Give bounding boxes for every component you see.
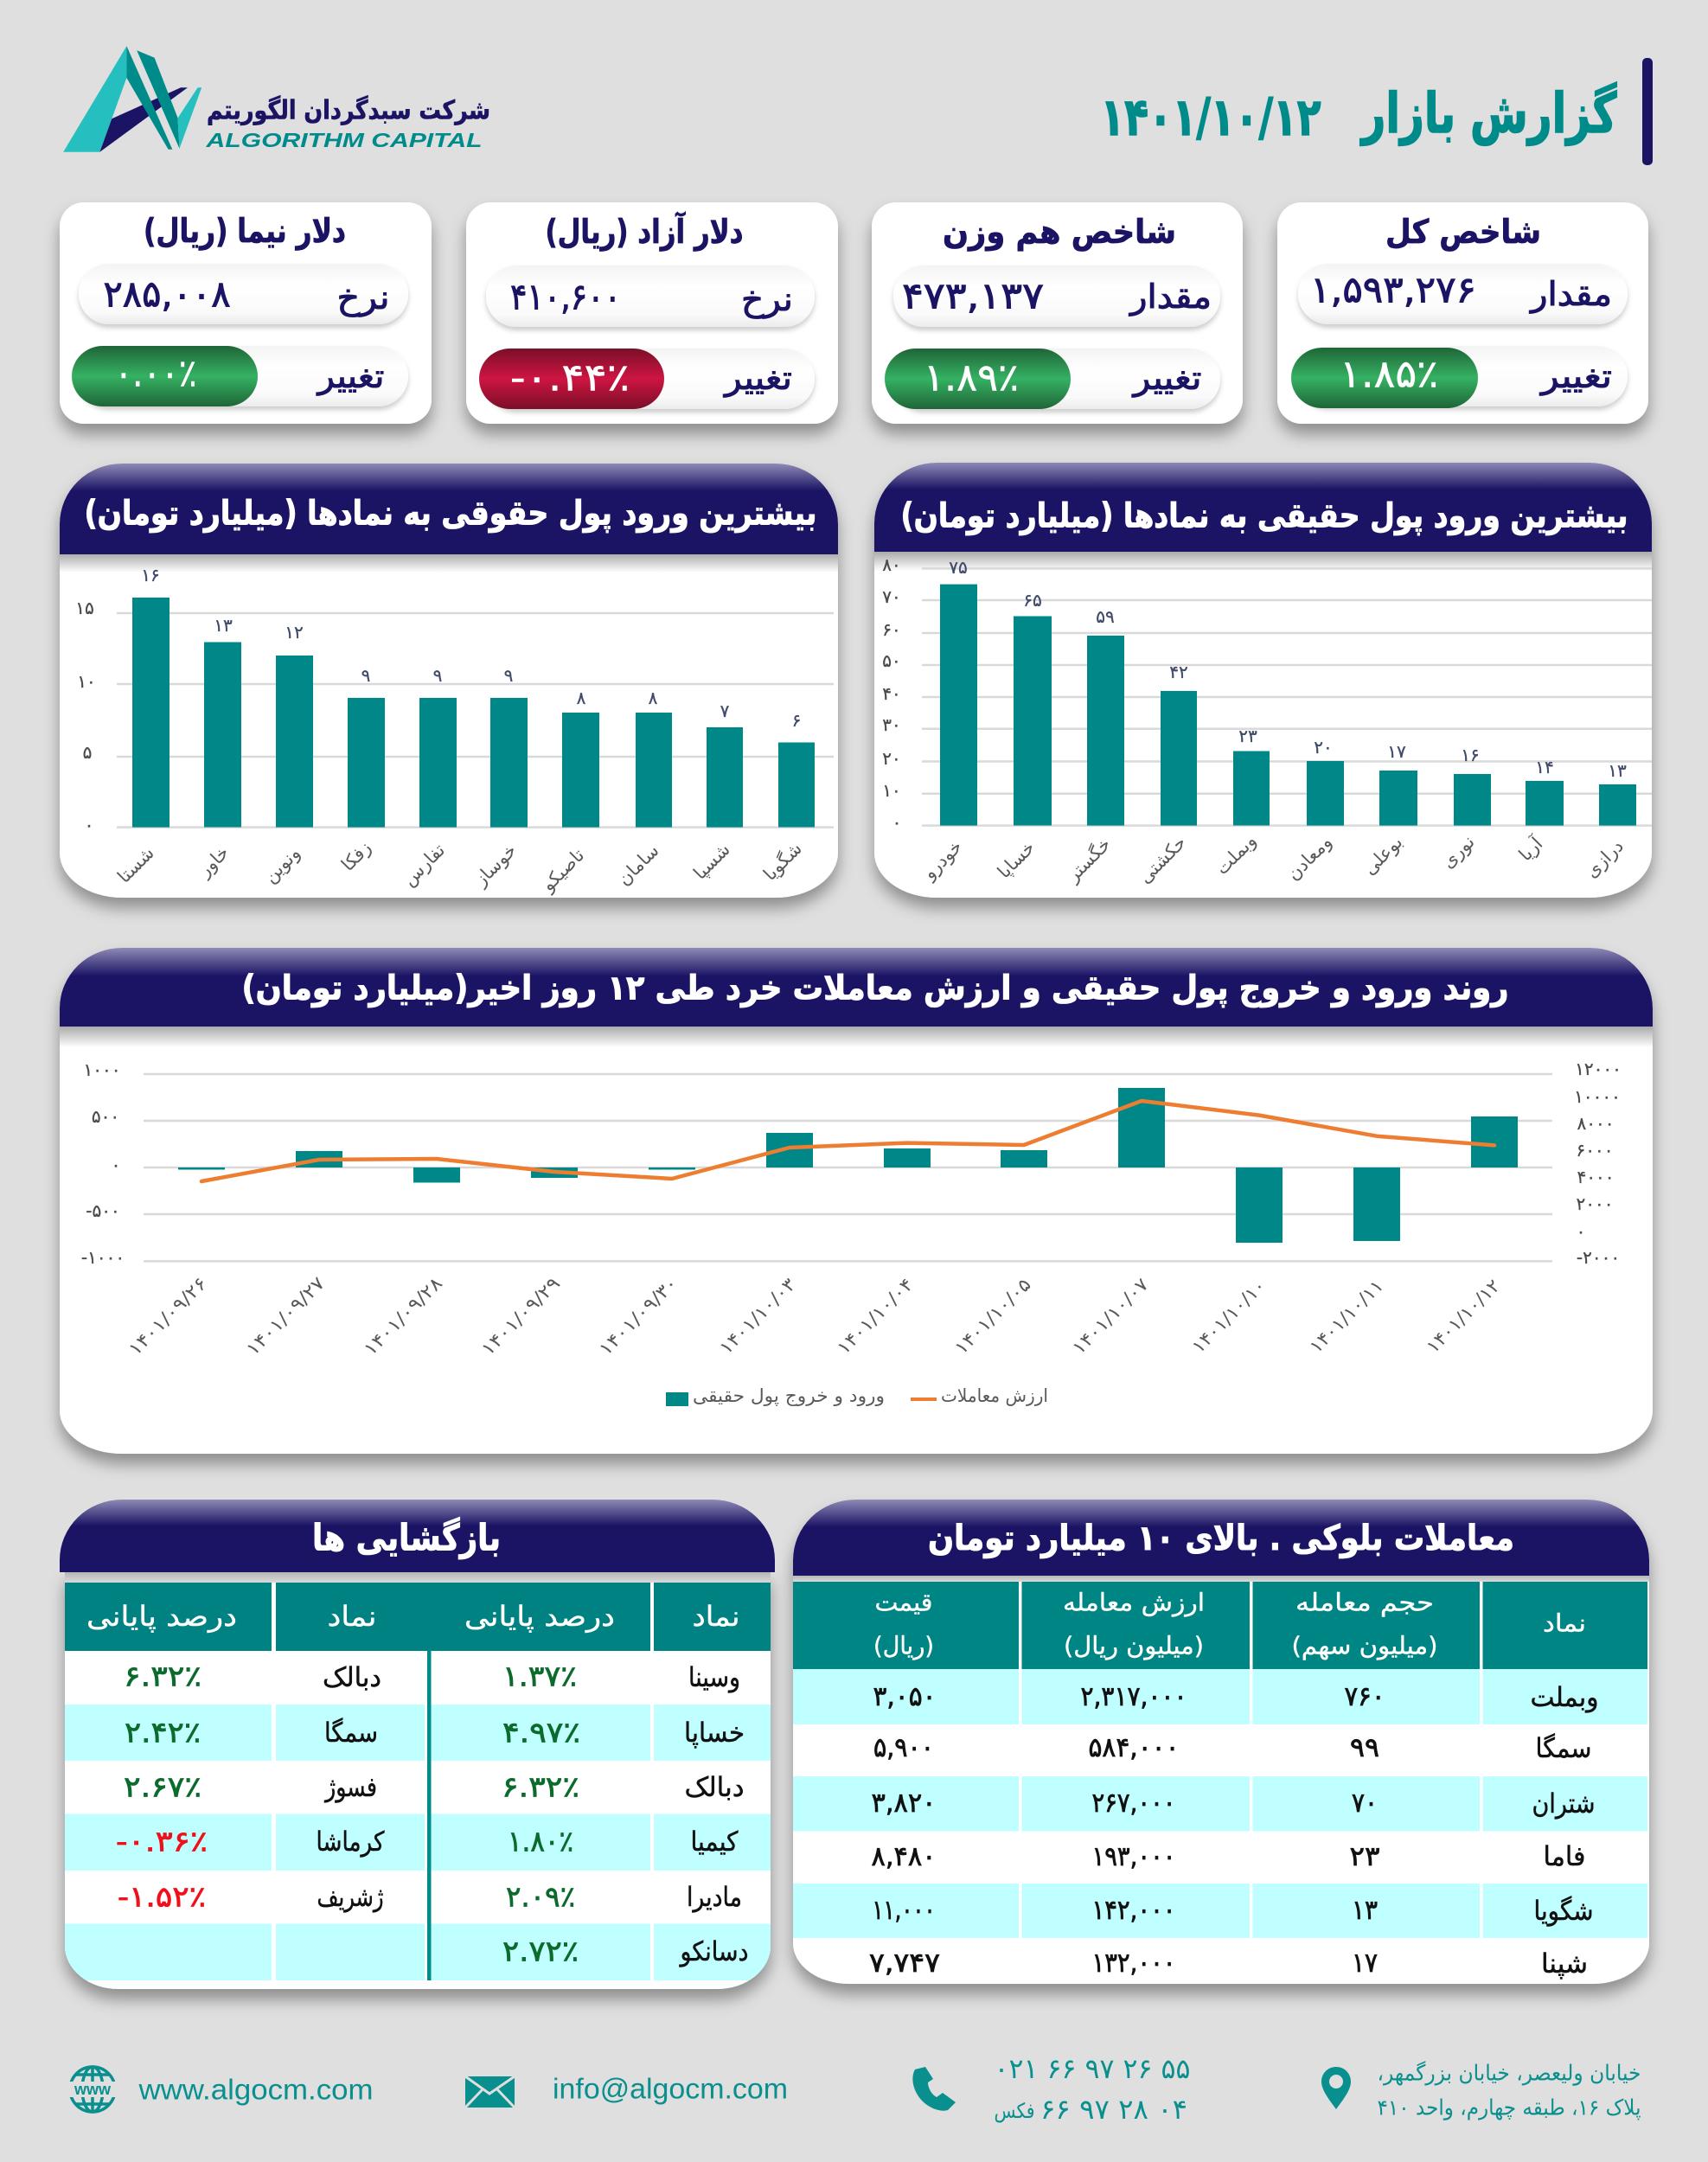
bar chart: real money inflow: ۳۰ [882, 714, 901, 735]
combo chart: money flow and trade value: ۴۰۰۰ [1577, 1167, 1614, 1187]
combo chart: money flow and trade value: ۲۰۰۰ [1577, 1193, 1613, 1214]
table: reopened symbols: فسوژ [323, 1772, 377, 1803]
table: block trades: (میلیون سهم) [1292, 1631, 1437, 1660]
bar chart: real money inflow: وبملت [1212, 830, 1260, 879]
table: reopened symbols: کرماشا [317, 1826, 385, 1858]
change pill: تغییر [1539, 357, 1612, 396]
value pill: نرخ [337, 278, 389, 317]
bar chart: legal money inflow: سامان [613, 840, 663, 890]
bar chart: legal money inflow: ۱۲ [285, 622, 304, 643]
bar chart: legal money inflow: ۱۰ [77, 671, 96, 692]
table: reopened symbols: نماد [327, 1600, 377, 1633]
card title: شاخص کل [1385, 213, 1541, 251]
panel header [60, 948, 1653, 1027]
bar chart: real money inflow: ۸۰ [882, 554, 901, 575]
combo chart: money flow and trade value: ۱۴۰۱/۰۹/۲۷ [242, 1273, 329, 1359]
bar chart: legal money inflow: ۱۶ [141, 565, 160, 585]
bar chart: real money inflow: نوری [1437, 831, 1479, 873]
bar chart: real money inflow: بوعلی [1359, 832, 1406, 879]
bar chart: legal money inflow: ۵ [83, 742, 92, 763]
table: reopened symbols: ۱.۸۰٪ [508, 1825, 573, 1858]
card title: دلار نیما (ریال) [144, 212, 346, 250]
bar chart: real money inflow: خودرو [918, 836, 966, 884]
combo chart: money flow and trade value: ۱۴۰۱/۱۰/۱۲ [1423, 1276, 1504, 1357]
bar chart: legal money inflow: زفکا [337, 837, 375, 875]
footer: phone: ۰۲۱ ۶۶ ۹۷ ۲۶ ۵۵ [995, 2052, 1190, 2085]
table: block trades: قیمت [875, 1588, 932, 1617]
icon: map pin [1321, 2067, 1351, 2109]
table: reopened symbols: ۲.۰۹٪ [506, 1880, 575, 1913]
table: block trades: ۲,۳۱۷,۰۰۰ [1081, 1681, 1187, 1712]
table: block trades: ۱۴۲,۰۰۰ [1091, 1895, 1176, 1926]
bar chart: real money inflow: ۰ [892, 812, 901, 833]
value pill: ۱,۵۹۳,۲۷۶ [1310, 268, 1476, 311]
table: block trades: ۳,۰۵۰ [873, 1681, 936, 1712]
combo chart: money flow and trade value: ۱۴۰۱/۰۹/۲۶ [125, 1273, 211, 1359]
table: reopened symbols: دبالک [323, 1662, 381, 1693]
table: block trades: ۵۸۴,۰۰۰ [1088, 1732, 1180, 1763]
bar chart: real money inflow: خساپا [994, 837, 1039, 882]
panel title: بیشترین ورود پول حقوقی به نمادها (میلیارد تومان) [85, 495, 816, 533]
bar chart: real money inflow: ۲۰ [1314, 737, 1333, 758]
combo chart: money flow and trade value: ۱۴۰۱/۱۰/۰۴ [833, 1274, 918, 1359]
change pill: تغییر [723, 359, 792, 398]
value pill: ۴۱۰,۶۰۰ [510, 275, 621, 318]
footer: address: پلاک ۱۶، طبقه چهارم، واحد ۴۱۰ [1377, 2095, 1641, 2120]
bar chart: legal money inflow: تفارس [399, 840, 449, 890]
combo chart: money flow and trade value: ۱۴۰۱/۱۰/۱۱ [1306, 1276, 1387, 1357]
bar chart: legal money inflow: ۰ [85, 815, 93, 835]
combo chart: money flow and trade value: -۲۰۰۰ [1577, 1247, 1620, 1268]
combo chart: money flow and trade value [81, 1059, 1622, 1359]
card title: شاخص هم وزن [943, 213, 1176, 252]
chart legend: ورود و خروج پول حقیقی [693, 1385, 885, 1407]
card title: دلار آزاد (ریال) [545, 211, 744, 251]
combo chart: money flow and trade value: ۰ [1577, 1221, 1585, 1242]
panel title: روند ورود و خروج پول حقیقی و ارزش معاملات خرد طی ۱۲ روز اخیر(میلیارد تومان) [241, 969, 1508, 1008]
combo chart: money flow and trade value: ۰ [112, 1155, 120, 1175]
table: reopened symbols: مادیرا [687, 1882, 742, 1913]
table: block trades: (میلیون ریال) [1064, 1631, 1204, 1660]
table: block trades [793, 1582, 1647, 1984]
icon: globe: www [74, 2081, 112, 2098]
combo chart: money flow and trade value: ۱۰۰۰۰ [1574, 1086, 1621, 1107]
change pill: تغییر [316, 357, 384, 396]
bar chart: real money inflow: ۵۹ [1096, 606, 1115, 627]
table: block trades: ۱۳ [1352, 1895, 1378, 1926]
bar chart: legal money inflow: شگویا [759, 838, 806, 885]
table: reopened symbols: ۶.۳۲٪ [124, 1659, 202, 1693]
table: reopened symbols: ژشریف [317, 1882, 384, 1913]
panel title: بازگشایی ها [312, 1517, 501, 1558]
value pill: نرخ [741, 280, 793, 319]
bar chart: legal money inflow: ۹ [361, 665, 370, 686]
footer: website: www.algocm.com [138, 2074, 374, 2105]
table: reopened symbols [65, 1583, 771, 1980]
bar chart: real money inflow: ۲۳ [1238, 726, 1257, 746]
chart legend: ارزش معاملات [941, 1385, 1048, 1406]
footer: email [465, 2072, 788, 2108]
bar chart: real money inflow: آریا [1514, 832, 1547, 865]
table: reopened symbols: وسینا [688, 1662, 740, 1693]
value pill: مقدار [1529, 275, 1612, 313]
bar chart: real money inflow: ومعادن [1283, 831, 1336, 885]
change pill: ۰.۰۰٪ [114, 351, 197, 396]
table: block trades: ۵,۹۰۰ [873, 1732, 934, 1763]
bar chart: real money inflow: خگستر [1062, 834, 1115, 886]
table: reopened symbols: درصد پایانی [86, 1600, 237, 1633]
bar chart: legal money inflow: تاصیکو [537, 845, 588, 896]
table: reopened symbols: ۶.۳۲٪ [502, 1769, 579, 1804]
change pill [1291, 346, 1628, 408]
bar chart: legal money inflow: ۸ [577, 688, 586, 708]
table: block trades: ۱۷ [1352, 1948, 1378, 1979]
change pill [479, 349, 815, 409]
table: block trades: ۹۹ [1350, 1732, 1379, 1763]
chart legend [666, 1385, 1048, 1407]
logo: Algorithm Capital [63, 46, 490, 152]
table: block trades: ۱۳۲,۰۰۰ [1091, 1948, 1176, 1979]
change pill [72, 346, 408, 406]
change pill: ۱.۸۹٪ [924, 356, 1019, 400]
table: reopened symbols: نماد [692, 1600, 740, 1633]
panel title: معاملات بلوکی . بالای ۱۰ میلیارد تومان [928, 1519, 1514, 1558]
change pill [885, 349, 1220, 409]
table: block trades: (ریال) [873, 1631, 934, 1660]
table: reopened symbols: ۲.۷۲٪ [502, 1934, 579, 1968]
value pill [486, 265, 815, 327]
bar chart: real money inflow: ۱۳ [1608, 760, 1627, 781]
icon: handset [912, 2067, 956, 2111]
bar chart: legal money inflow: ۱۵ [75, 598, 94, 618]
table: block trades: سمگا [1536, 1733, 1591, 1764]
value pill [893, 265, 1220, 327]
bar chart: real money inflow [882, 554, 1652, 887]
logo: Algorithm Capital: شرکت سبدگردان الگوریتم [207, 95, 490, 126]
bar chart: legal money inflow: خوساز [470, 840, 521, 891]
table: block trades: ۷,۷۴۷ [869, 1948, 940, 1979]
combo chart: money flow and trade value: -۵۰۰ [86, 1200, 120, 1221]
bar chart: legal money inflow [75, 565, 834, 896]
combo chart: money flow and trade value: ۸۰۰۰ [1577, 1113, 1614, 1134]
panel: reopened symbols [60, 1500, 775, 1989]
table: reopened symbols: سمگا [324, 1717, 378, 1749]
panel: block trades [793, 1500, 1649, 1984]
combo chart: money flow and trade value: ۱۴۰۱/۰۹/۳۰ [595, 1273, 681, 1359]
panel: top real money inflow [874, 463, 1652, 898]
table: reopened symbols: کیمیا [690, 1826, 739, 1858]
table: reopened symbols: ۱.۳۷٪ [502, 1659, 577, 1693]
table: block trades: ۸,۴۸۰ [872, 1841, 936, 1872]
table: block trades: ۷۶۰ [1344, 1681, 1385, 1712]
table: block trades: ۲۳ [1349, 1841, 1380, 1872]
table: block trades: فاما [1543, 1841, 1586, 1872]
bar chart: real money inflow: حکشتی [1135, 832, 1190, 887]
card: Nima dollar [60, 202, 432, 424]
combo chart: money flow and trade value: ۱۴۰۱/۱۰/۱۰ [1188, 1276, 1270, 1357]
table: reopened symbols: خساپا [684, 1717, 745, 1749]
panel: top legal money inflow [60, 464, 838, 898]
combo chart: money flow and trade value: ۱۴۰۱/۱۰/۰۷ [1068, 1274, 1153, 1359]
table: block trades: حجم معامله [1295, 1588, 1434, 1617]
footer: phone [912, 2052, 1190, 2126]
combo chart: money flow and trade value: ۵۰۰ [92, 1106, 119, 1127]
bar chart: legal money inflow: ۷ [720, 700, 730, 721]
bar chart: legal money inflow: خاور [194, 841, 233, 881]
bar chart: real money inflow: ۱۰ [882, 780, 901, 801]
change pill: تغییر [1131, 359, 1202, 398]
bar chart: real money inflow: ۱۴ [1535, 757, 1554, 777]
value pill: مقدار [1129, 278, 1212, 316]
table: reopened symbols: ۲.۶۷٪ [124, 1769, 202, 1804]
bar chart: legal money inflow: ونوین [259, 842, 304, 887]
bar chart: real money inflow: ۷۵ [949, 557, 968, 578]
bar chart: real money inflow: ۵۰ [882, 650, 901, 671]
bar chart: legal money inflow: ۹ [433, 665, 442, 686]
bar chart: real money inflow: ۶۵ [1023, 590, 1042, 611]
footer: address [1321, 2060, 1641, 2120]
table: block trades: شگویا [1534, 1896, 1593, 1927]
combo chart: money flow and trade value: ۱۴۰۱/۰۹/۲۹ [477, 1273, 564, 1359]
combo chart: money flow and trade value: ۱۴۰۱/۱۰/۰۳ [715, 1274, 800, 1359]
change pill: -۰.۴۴٪ [510, 356, 630, 400]
panel header [60, 1500, 775, 1572]
table: reopened symbols: دسانکو [679, 1936, 749, 1967]
card: equal weight index [872, 202, 1243, 424]
table: reopened symbols: -۰.۳۶٪ [116, 1825, 208, 1858]
footer: phone: ۶۶ ۹۷ ۲۸ ۰۴ [1040, 2093, 1187, 2126]
bar chart: legal money inflow: ۹ [504, 665, 513, 686]
combo chart: money flow and trade value: ۱۴۰۱/۱۰/۰۵ [950, 1274, 1035, 1359]
table: block trades: ۷۰ [1352, 1788, 1378, 1819]
footer: address: خیابان ولیعصر، خیابان بزرگمهر، [1377, 2060, 1641, 2086]
bar chart: legal money inflow: ۱۳ [214, 615, 233, 636]
report date: ۱۴۰۱/۱۰/۱۲ [1100, 87, 1321, 148]
value pill [79, 264, 408, 324]
card: free-market dollar [466, 202, 838, 424]
logo: Algorithm Capital: ALGORITHM CAPITAL [205, 129, 483, 151]
table: reopened symbols: دبالک [685, 1772, 744, 1803]
table: block trades: نماد [1543, 1609, 1586, 1638]
table: block trades: ارزش معامله [1063, 1588, 1205, 1617]
table: block trades: ۳,۸۲۰ [872, 1788, 936, 1819]
footer: website [66, 2067, 374, 2112]
table: reopened symbols: ۲.۴۲٪ [125, 1716, 201, 1749]
bar chart: real money inflow: ۶۰ [882, 619, 901, 640]
panel header [60, 464, 838, 554]
bar chart: legal money inflow: ۸ [649, 688, 658, 708]
combo chart: money flow and trade value: ۱۰۰۰ [84, 1059, 120, 1080]
combo chart: money flow and trade value: ۶۰۰۰ [1577, 1140, 1613, 1161]
footer: phone: فکس [995, 2099, 1034, 2123]
change pill: ۱.۸۵٪ [1340, 353, 1438, 396]
main title: گزارش بازار [1359, 81, 1617, 146]
table: block trades: ۱۱,۰۰۰ [872, 1895, 936, 1926]
panel header [793, 1500, 1649, 1576]
bar chart: real money inflow: ۷۰ [882, 586, 901, 607]
panel header [874, 463, 1652, 552]
header accent bar [1642, 58, 1653, 165]
bar chart: real money inflow: ۱۷ [1387, 741, 1406, 762]
table: block trades: شتران [1532, 1788, 1595, 1820]
footer: email: info@algocm.com [553, 2072, 788, 2105]
table: reopened symbols: ۴.۹۷٪ [502, 1716, 580, 1749]
icon: envelope [465, 2076, 515, 2108]
panel: 12-day retail trend [60, 948, 1653, 1454]
bar chart: real money inflow: درازی [1581, 835, 1628, 882]
value pill: ۲۸۵,۰۰۸ [104, 273, 230, 315]
table: block trades: وبملت [1531, 1682, 1598, 1713]
icon: globe [66, 2067, 119, 2112]
bar chart: legal money inflow: شستا [113, 842, 158, 887]
value pill: ۴۷۳,۱۳۷ [902, 275, 1044, 317]
table: reopened symbols: درصد پایانی [464, 1600, 615, 1633]
table: block trades: ۱۹۳,۰۰۰ [1091, 1841, 1176, 1872]
bar chart: real money inflow: ۲۰ [882, 748, 901, 769]
table: block trades: ۲۶۷,۰۰۰ [1091, 1788, 1176, 1819]
table: reopened symbols: -۱.۵۲٪ [118, 1880, 206, 1913]
combo chart: money flow and trade value: ۱۴۰۱/۰۹/۲۸ [360, 1273, 446, 1359]
card: total index [1277, 202, 1648, 424]
bar chart: real money inflow: ۴۲ [1169, 662, 1188, 682]
table: block trades: شپنا [1541, 1948, 1588, 1980]
combo chart: money flow and trade value: ۱۲۰۰۰ [1575, 1059, 1622, 1079]
bar chart: real money inflow: ۱۶ [1461, 745, 1480, 765]
bar chart: legal money inflow: ۶ [792, 710, 801, 731]
value pill [1298, 264, 1628, 324]
combo chart: money flow and trade value: -۱۰۰۰ [81, 1247, 125, 1268]
bar chart: legal money inflow: شسپا [689, 839, 734, 884]
bar chart: real money inflow: ۴۰ [882, 683, 901, 704]
